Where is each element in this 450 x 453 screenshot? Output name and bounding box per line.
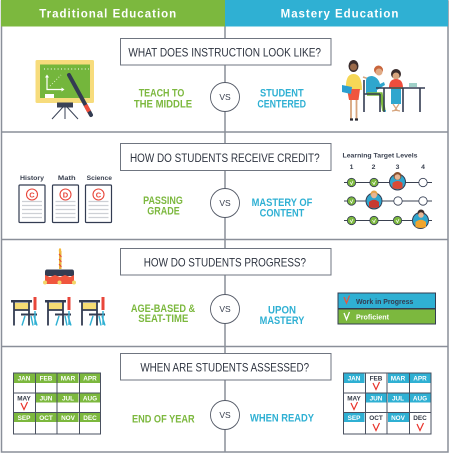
report cards bbox=[19, 175, 112, 222]
learning target levels chart: 2 bbox=[372, 164, 376, 171]
calendar: end of year bbox=[14, 373, 100, 434]
calendar: when ready: NOV bbox=[391, 415, 406, 422]
calendar: end of year: NOV bbox=[61, 415, 76, 422]
calendar: when ready: JUN bbox=[370, 396, 383, 402]
desk 3 bbox=[79, 297, 105, 326]
vs badge bbox=[210, 294, 240, 324]
calendar: when ready: MAR bbox=[391, 376, 406, 382]
calendar: when ready: MAY bbox=[347, 396, 362, 402]
label: age-based and seat-time: AGE-BASED & bbox=[131, 303, 195, 315]
header: Traditional Education: Traditional Education bbox=[39, 8, 176, 20]
icon: three school desks bbox=[11, 297, 105, 326]
avatar: level 2 student bbox=[366, 190, 382, 209]
label: upon mastery: UPON bbox=[268, 305, 296, 317]
card: science bbox=[86, 175, 112, 222]
question: progress: HOW DO STUDENTS PROGRESS? bbox=[144, 255, 306, 269]
calendar: end of year: JUN bbox=[40, 396, 53, 402]
label: mastery of content: MASTERY OF bbox=[252, 197, 313, 209]
vs badge: VS bbox=[219, 304, 231, 314]
learning target levels chart: 4 bbox=[421, 164, 425, 171]
card: history: C bbox=[29, 190, 35, 199]
legend: work in progress and proficient bbox=[338, 292, 436, 324]
calendar: when ready: SEP bbox=[348, 415, 361, 422]
label: passing grade: GRADE bbox=[147, 206, 180, 218]
header: Mastery Education bbox=[225, 0, 448, 26]
desk 2 bbox=[45, 297, 71, 326]
label: teach to the middle bbox=[134, 88, 192, 111]
label: mastery of content bbox=[252, 197, 313, 220]
question: credit: HOW DO STUDENTS RECEIVE CREDIT? bbox=[130, 151, 320, 165]
learning target levels chart: Learning Target Levels bbox=[342, 153, 418, 160]
question: assessment bbox=[120, 354, 331, 380]
label: upon mastery: MASTERY bbox=[260, 315, 305, 327]
vs badge: VS bbox=[219, 410, 231, 420]
icon: birthday cake bbox=[43, 248, 76, 284]
label: mastery of content: CONTENT bbox=[260, 208, 305, 220]
question: instruction: WHAT DOES INSTRUCTION LOOK LIKE? bbox=[128, 46, 321, 60]
calendar: when ready: JUL bbox=[392, 396, 404, 402]
calendar: when ready bbox=[344, 373, 431, 434]
desk 1 bbox=[11, 297, 37, 326]
calendar: when ready: JAN bbox=[348, 376, 361, 382]
question: assessment: WHEN ARE STUDENTS ASSESSED? bbox=[140, 360, 309, 374]
calendar: end of year: MAR bbox=[61, 376, 76, 382]
label: age-based and seat-time: SEAT-TIME bbox=[138, 313, 188, 325]
icon: chalkboard with pointer bbox=[36, 60, 94, 119]
card: history: History bbox=[20, 175, 44, 182]
label: student centered: STUDENT bbox=[260, 88, 304, 100]
calendar: when ready: DEC bbox=[413, 415, 427, 422]
label: student centered: CENTERED bbox=[257, 99, 306, 111]
label: passing grade bbox=[143, 195, 183, 218]
card: science: C bbox=[96, 190, 102, 199]
learning target levels chart: 1 bbox=[350, 164, 354, 171]
label: teach to the middle: TEACH TO bbox=[139, 88, 185, 100]
calendar: end of year: MAY bbox=[17, 396, 32, 402]
vs badge: VS bbox=[219, 198, 231, 208]
label: passing grade: PASSING bbox=[143, 195, 183, 207]
card: science: Science bbox=[87, 175, 112, 182]
label: teach to the middle: THE MIDDLE bbox=[134, 99, 192, 111]
calendar: end of year: SEP bbox=[18, 415, 31, 422]
calendar: end of year: APR bbox=[83, 376, 97, 382]
calendar: end of year: JUL bbox=[62, 396, 74, 402]
vs badge bbox=[210, 82, 240, 112]
calendar: when ready: OCT bbox=[369, 415, 383, 422]
calendar: when ready: AUG bbox=[413, 396, 427, 402]
legend row: proficient: Proficient bbox=[356, 314, 390, 321]
label: upon mastery bbox=[260, 305, 305, 327]
question: credit bbox=[120, 144, 331, 170]
header: Traditional Education bbox=[1, 0, 225, 26]
calendar: when ready: APR bbox=[413, 376, 427, 382]
card: history bbox=[19, 175, 45, 222]
label: end of year: END OF YEAR bbox=[132, 414, 195, 426]
label: student centered bbox=[257, 88, 306, 111]
calendar: end of year: DEC bbox=[83, 415, 97, 422]
learning target levels chart bbox=[342, 153, 432, 228]
calendar: end of year: OCT bbox=[39, 415, 53, 422]
learning target levels chart: 3 bbox=[396, 164, 400, 171]
calendar: end of year: AUG bbox=[83, 396, 97, 402]
calendar: end of year: FEB bbox=[40, 376, 53, 382]
card: math: Math bbox=[58, 175, 76, 182]
question: progress bbox=[120, 248, 331, 275]
question: instruction bbox=[120, 38, 331, 65]
illustration: teacher and students at table bbox=[342, 60, 425, 120]
label: age-based and seat-time bbox=[131, 303, 195, 325]
vs badge bbox=[210, 400, 240, 430]
calendar: end of year: JAN bbox=[18, 376, 31, 382]
card: math: D bbox=[63, 190, 69, 199]
vs badge bbox=[210, 188, 240, 218]
header: Mastery Education: Mastery Education bbox=[281, 8, 398, 20]
vs badge: VS bbox=[219, 92, 231, 102]
card: math bbox=[52, 175, 78, 222]
label: when ready: WHEN READY bbox=[250, 412, 315, 424]
legend row: work in progress: Work in Progress bbox=[356, 299, 413, 306]
avatar: level 4 student bbox=[412, 210, 428, 228]
avatar: level 3 student bbox=[390, 172, 406, 190]
calendar: when ready: FEB bbox=[370, 376, 383, 382]
